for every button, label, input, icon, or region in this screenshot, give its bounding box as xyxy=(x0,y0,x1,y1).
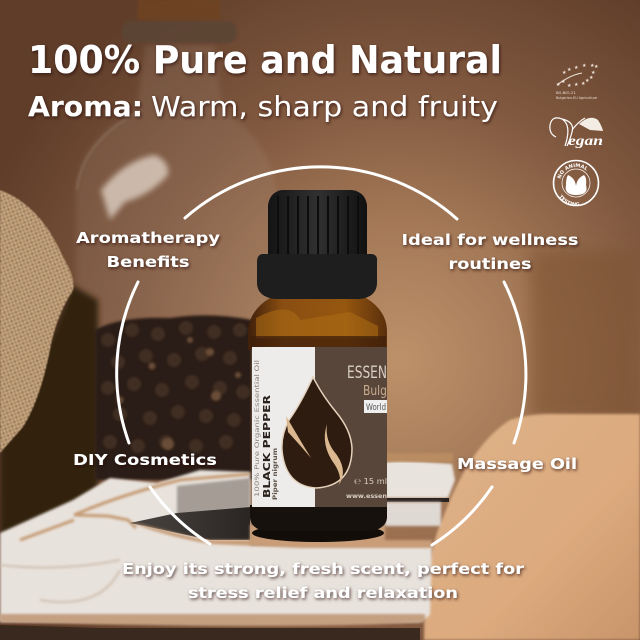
badge: no animal testing: TESTING xyxy=(560,194,580,205)
badge: EU organic leaf: ★ xyxy=(574,65,579,71)
badge: EU organic leaf: BG-BIO-21 xyxy=(556,90,576,95)
bottle reflection xyxy=(252,524,384,542)
badge: EU organic leaf: ★ xyxy=(589,75,594,81)
icon: oil drop xyxy=(282,377,352,488)
callout: ideal for wellness routines xyxy=(402,231,579,273)
label brand text: Bulg xyxy=(363,384,387,399)
label product text: BLACK PEPPER xyxy=(262,395,273,498)
label product text xyxy=(254,360,279,500)
callout: massage oil: Massage Oil xyxy=(457,455,577,473)
closing statement xyxy=(122,560,525,602)
peppercorns xyxy=(95,315,252,480)
badge: no animal testing: NO ANIMAL xyxy=(557,163,587,179)
badge: EU organic leaf xyxy=(556,63,599,100)
callout: aromatherapy benefits: Benefits xyxy=(106,253,190,271)
label brand text: www.essen xyxy=(346,492,387,500)
label brand text: ESSEN xyxy=(347,363,387,383)
burlap sack xyxy=(0,190,98,535)
subtitle: aroma: Warm, sharp and fruity xyxy=(151,90,498,123)
product bottle xyxy=(248,190,387,542)
badge: EU organic leaf: ★ xyxy=(591,70,596,76)
badge: EU organic leaf: ★ xyxy=(581,81,586,87)
badge: no animal testing xyxy=(552,160,600,206)
badge: vegan xyxy=(550,118,603,149)
label brand text: ℮ 15 ml xyxy=(354,477,387,486)
ring of arc segments xyxy=(117,167,526,545)
bottle base xyxy=(250,505,387,531)
badge: EU organic leaf: ★ xyxy=(561,79,566,85)
badge: EU organic leaf: ★ xyxy=(590,63,595,69)
callout: aromatherapy benefits: Aromatherapy xyxy=(76,229,220,247)
callout: aromatherapy benefits xyxy=(76,229,220,271)
frame right side xyxy=(385,460,455,498)
callout: ideal for wellness routines: routines xyxy=(448,255,532,273)
badge: EU organic leaf: ★ xyxy=(582,63,587,69)
mirror xyxy=(130,507,250,540)
amber glass shoulder xyxy=(248,298,387,350)
cap xyxy=(257,190,377,299)
badge: EU organic leaf: ★ xyxy=(567,67,572,73)
label xyxy=(252,347,387,507)
wooden block xyxy=(424,414,640,640)
label product text: 100% Pure Organic Essential Oil xyxy=(254,360,261,497)
badge: EU organic leaf: ★ xyxy=(567,83,572,89)
badge: EU organic leaf: ★ xyxy=(562,70,567,76)
callout: DIY cosmetics: DIY Cosmetics xyxy=(73,451,217,469)
closing statement: Enjoy its strong, fresh scent, perfect for xyxy=(122,560,525,578)
callout: ideal for wellness routines: Ideal for wellness xyxy=(402,231,579,249)
label brand text: World xyxy=(366,403,386,413)
label product text: Piper nigrum xyxy=(272,448,279,500)
badge: EU organic leaf: ★ xyxy=(585,78,590,84)
badge: EU organic leaf: ★ xyxy=(574,82,579,88)
title: 100% Pure and Natural xyxy=(28,38,502,83)
badge: EU organic leaf: ★ xyxy=(556,82,561,88)
dark table strip xyxy=(0,625,420,640)
badge: EU organic leaf: ★ xyxy=(594,64,599,70)
frame grey inset xyxy=(177,478,250,516)
frame gilded trim xyxy=(20,474,250,540)
subtitle: aroma: Aroma: xyxy=(28,90,143,123)
closing statement: stress relief and relaxation xyxy=(188,584,458,602)
white frame tray xyxy=(0,453,455,640)
badge: vegan: egan xyxy=(568,134,603,149)
label brand text xyxy=(346,363,387,500)
badge: EU organic leaf: Bulgarian-EU Agriculture xyxy=(556,96,597,100)
glass jar xyxy=(76,0,276,480)
subtitle: aroma xyxy=(28,90,498,123)
